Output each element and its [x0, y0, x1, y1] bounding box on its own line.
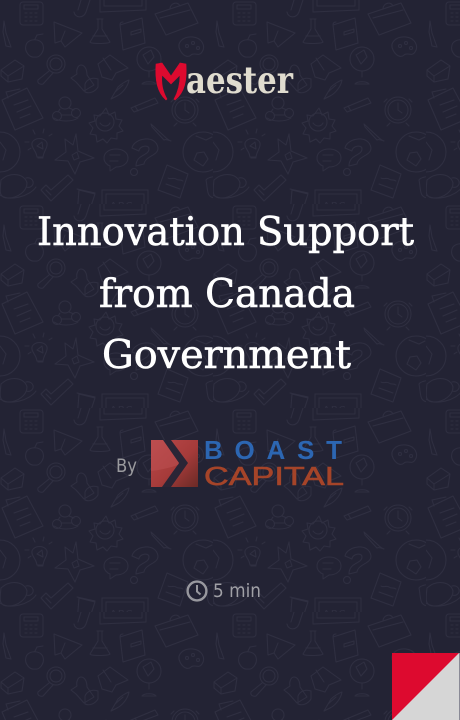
reading time [188, 580, 261, 602]
corner fold [392, 653, 460, 720]
title: Innovation Support [37, 210, 414, 255]
capital wordmark: CAPITAL [204, 461, 344, 491]
icon: clock [188, 582, 206, 600]
icon: Boast Capital square with chevron [151, 440, 198, 487]
icon: red M mask [156, 63, 186, 100]
title: Government [102, 333, 351, 378]
wordmark: aester [186, 58, 293, 102]
duration text: 5 min [213, 580, 261, 602]
title: from Canada [99, 272, 355, 317]
title [37, 210, 414, 378]
by label: By [116, 455, 137, 477]
boast wordmark: BOAST [204, 435, 342, 465]
logo: Maester [156, 58, 293, 102]
byline: By Boast Capital [116, 435, 344, 491]
